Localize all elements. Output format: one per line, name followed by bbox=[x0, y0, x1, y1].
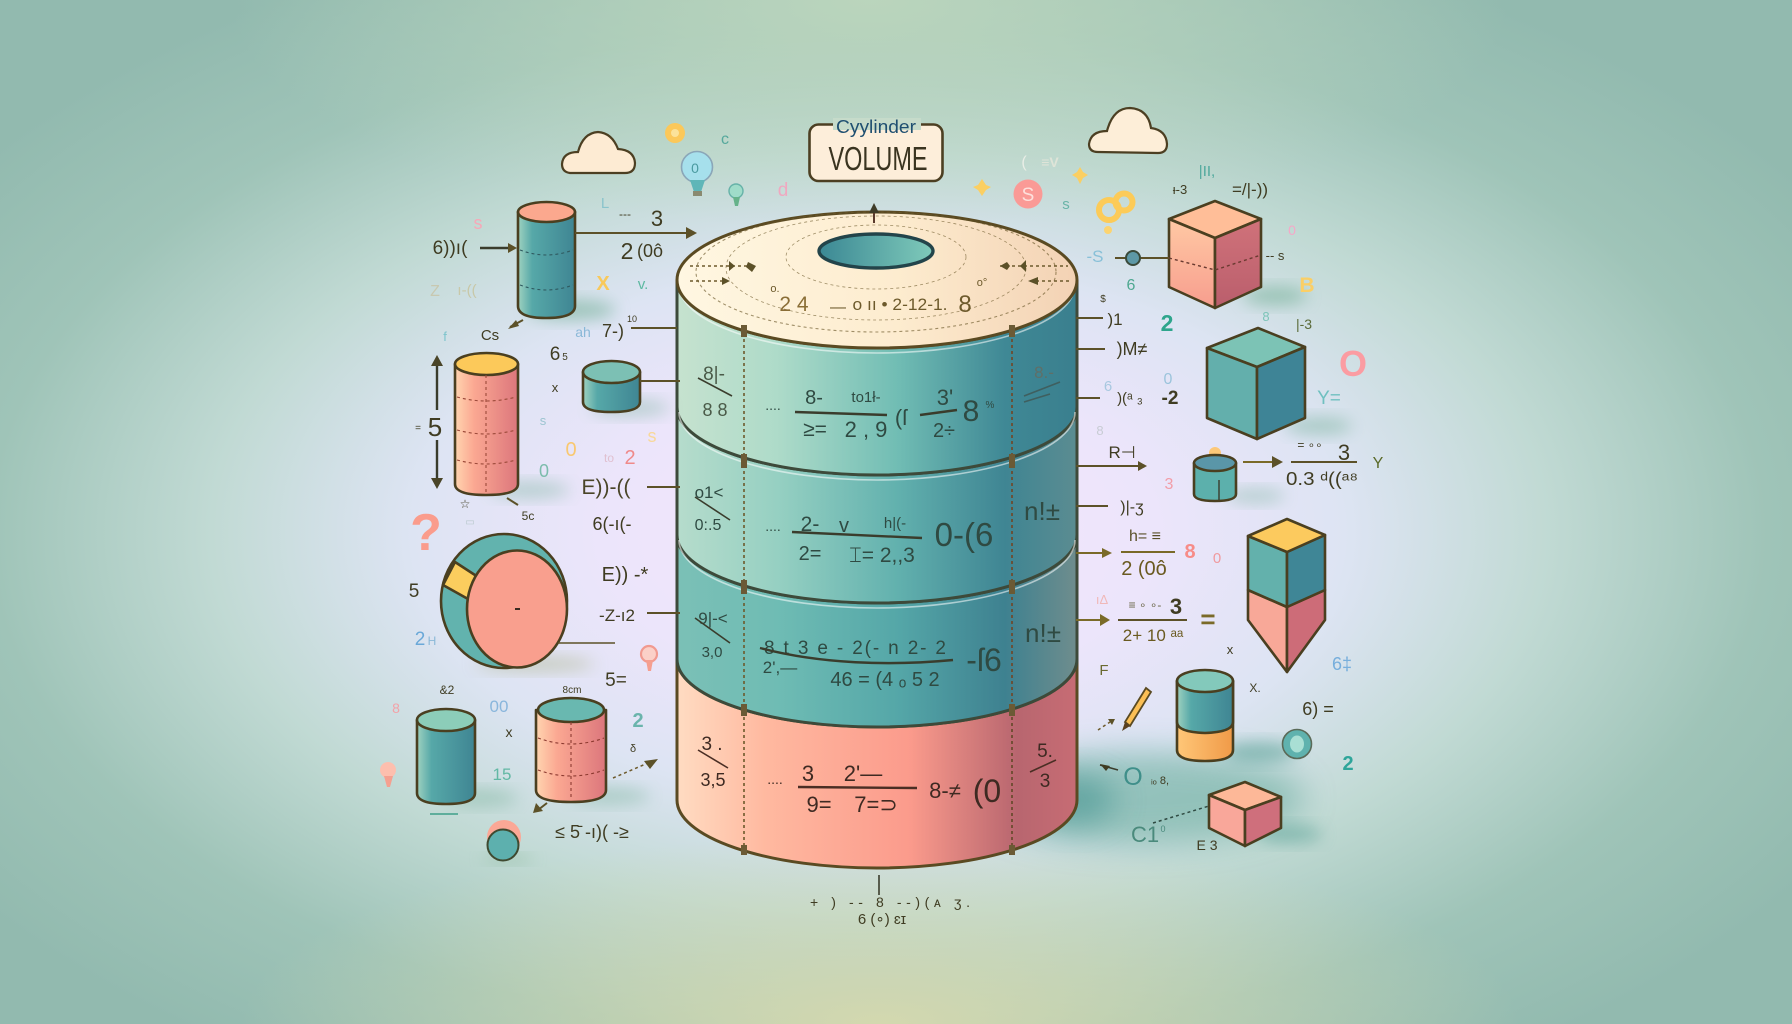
floating letters top right: ≡V bbox=[1041, 154, 1059, 170]
cube 2 teal bbox=[1207, 328, 1352, 439]
bottom dimension label: + ) -- 8 --)(ᴀ ʒ. bbox=[810, 894, 970, 910]
band 4 labels: 3 bbox=[802, 761, 814, 786]
floating letters top right: 2 bbox=[1161, 310, 1173, 336]
dashed arrow near pencil bbox=[1098, 719, 1115, 730]
band 3: teal bbox=[677, 535, 1077, 727]
arrow bbox=[533, 803, 547, 813]
cube labels top bbox=[1173, 163, 1268, 199]
band 4 labels: 9= bbox=[806, 792, 832, 817]
label over arrow: --- bbox=[619, 207, 631, 221]
floating letters top left: s bbox=[474, 213, 482, 233]
disc labels: E)) -* bbox=[602, 564, 649, 586]
top-face radius arrows left bbox=[690, 261, 756, 285]
top-face radius arrows right bbox=[1000, 260, 1070, 285]
callouts right column bbox=[1076, 294, 1216, 645]
label O near cube 3: ᵢₒ 8, bbox=[1151, 775, 1169, 787]
callout line 4 arrow bbox=[1076, 443, 1147, 471]
labels cube 3: 0 bbox=[1160, 824, 1166, 834]
band 1 labels: 8|- bbox=[703, 364, 725, 385]
label over arrow: 2 bbox=[621, 238, 633, 264]
callout band 1 left: ah bbox=[575, 324, 591, 340]
band 4 labels: 8-≠ bbox=[929, 778, 961, 803]
cube labels top: |II, bbox=[1199, 163, 1215, 180]
pink swirl ball: S bbox=[1022, 185, 1034, 206]
band 2 labels: o1< bbox=[695, 483, 723, 502]
callout band 3 left: -Z-ı2 bbox=[599, 606, 635, 625]
label 5 =: 5= bbox=[605, 670, 627, 691]
floating letters top right: 3 bbox=[1165, 476, 1174, 493]
marker ticks bbox=[741, 325, 1015, 855]
bulb salmon bbox=[380, 762, 396, 787]
band 4 labels: 7=⊃ bbox=[854, 792, 898, 817]
pink swirl ball bbox=[1014, 180, 1042, 208]
band 3 labels: 8 t 3 e - 2(- n 2- 2 bbox=[764, 638, 946, 659]
top-face formula: o ıı • 2-12-1. bbox=[852, 295, 948, 314]
top face bbox=[677, 212, 1077, 348]
top-face formula bbox=[770, 277, 987, 318]
labels near lower cylinders: 8cm bbox=[563, 685, 581, 696]
floating letters top right: s bbox=[1062, 196, 1070, 213]
labels near cylinder C: ▭ bbox=[465, 517, 475, 528]
floating letters top left: X bbox=[596, 273, 610, 295]
arrow cylinder A to main bbox=[575, 227, 697, 239]
band 1 labels: 8.- bbox=[1034, 363, 1054, 382]
callout line 4 arrow: R⊣ bbox=[1108, 443, 1136, 462]
callout band 3 left bbox=[599, 606, 680, 625]
floating letters top left: ı-(( bbox=[457, 282, 477, 299]
gold rings bbox=[1099, 194, 1132, 220]
bulb small bbox=[729, 184, 743, 206]
labels cube 3: C1 bbox=[1131, 822, 1159, 847]
floating letters top right: 8 bbox=[1096, 423, 1104, 438]
title badge bbox=[810, 117, 942, 181]
cylinder D teal bbox=[417, 709, 518, 806]
disc labels bbox=[409, 564, 649, 650]
band 3 labels: -ſ6 bbox=[966, 642, 1002, 678]
label right of ball: ≤ 5̄ -ı)( -≥ bbox=[555, 822, 629, 842]
label cylinder A left: 6))ı( bbox=[433, 238, 468, 259]
label O near cube 3 bbox=[1100, 763, 1169, 791]
band 3 labels: n!± bbox=[1025, 618, 1061, 648]
cube 1 salmon bbox=[1169, 201, 1307, 308]
band 4 labels: 3 bbox=[1040, 771, 1050, 792]
band 4 labels: 5. bbox=[1037, 741, 1053, 762]
callout fraction 6: 2 (0ô bbox=[1121, 558, 1167, 580]
concentric dashed rings on top face bbox=[696, 212, 1056, 332]
cube labels top: =/|-)) bbox=[1232, 180, 1268, 199]
band 1 labels bbox=[698, 363, 1060, 442]
band 1 labels: % bbox=[986, 400, 995, 411]
gold stars bbox=[973, 167, 1088, 196]
floating letters top left: f bbox=[443, 329, 447, 344]
connector to cube 1 bbox=[1115, 251, 1169, 265]
callout fraction 6: h= ≡ bbox=[1129, 528, 1161, 545]
floating letters top right: 0 bbox=[1213, 550, 1221, 567]
labels near cylinder C: 5c bbox=[522, 509, 534, 523]
callout band 1 left: 7-) bbox=[602, 321, 624, 341]
label O near cube 3: O bbox=[1123, 763, 1143, 791]
cloud left bbox=[562, 132, 635, 173]
floating letters top left: Z bbox=[430, 283, 440, 300]
callout line 2 bbox=[1076, 339, 1148, 359]
labels near lower cylinders: 2 bbox=[632, 710, 644, 732]
labels near lower cylinders bbox=[392, 683, 644, 784]
floating digits mid left: s bbox=[540, 413, 547, 428]
floating letters top right: X. bbox=[1249, 681, 1261, 695]
band 4 labels: 3,5 bbox=[700, 770, 726, 790]
top-face formula: 2 4 bbox=[779, 293, 809, 316]
cube 1 side labels: -- s bbox=[1266, 248, 1285, 263]
fraction right of F bbox=[1286, 438, 1384, 489]
band 3 labels bbox=[695, 609, 1061, 691]
label over arrow: (0ô bbox=[637, 241, 663, 261]
labels near lower cylinders: 8 bbox=[392, 700, 400, 716]
callout line 3: )(ᵃ ₃ bbox=[1117, 390, 1143, 407]
band 1 labels: (ſ bbox=[895, 405, 908, 430]
band 1 labels: to1ł- bbox=[851, 389, 881, 406]
floating letters top right bbox=[1021, 154, 1354, 775]
cylinder B small teal bbox=[583, 361, 680, 416]
labels near cylinder C: ☆ bbox=[460, 497, 470, 511]
bulb pink bbox=[641, 646, 657, 671]
label near small cylinder: 6 bbox=[550, 344, 560, 365]
cube 1 side labels bbox=[1262, 222, 1315, 332]
labels near lower cylinders: δ bbox=[630, 743, 636, 755]
floating digits mid left: 0 bbox=[565, 439, 577, 461]
callout band 1 left bbox=[575, 314, 677, 341]
labels near lower cylinders: 00 bbox=[490, 697, 508, 716]
up arrow above cylinder bbox=[869, 203, 879, 223]
disc labels: H bbox=[428, 634, 436, 648]
band 3 labels: 46 = (4 ₒ 5 2 bbox=[830, 669, 940, 691]
band 1 labels: 3' bbox=[937, 385, 953, 410]
floating letters top right: 6 bbox=[1127, 277, 1136, 294]
fraction right of F: = ∘∘ bbox=[1297, 438, 1323, 452]
cylinder A teal salmon top bbox=[518, 202, 616, 320]
callout line 1: )1 bbox=[1107, 310, 1123, 329]
fraction right of F: 3 bbox=[1338, 440, 1350, 465]
band 4 labels: (0 bbox=[973, 773, 1001, 809]
band 3 labels: 9|-< bbox=[698, 609, 728, 628]
band 3 labels: 2',— bbox=[763, 658, 797, 677]
band 2 labels: 2= bbox=[799, 543, 821, 565]
band 1: teal bbox=[677, 280, 1077, 475]
band 3 labels: 3,0 bbox=[702, 644, 722, 661]
top-face formula: — bbox=[830, 299, 846, 316]
top-face formula: o° bbox=[977, 277, 987, 289]
callout line 1: $ bbox=[1100, 294, 1106, 305]
band 2 labels: .... bbox=[765, 518, 781, 534]
label near small cylinder: 5 bbox=[562, 352, 568, 363]
band 1 labels: 8 8 bbox=[702, 400, 728, 420]
floating letters top left: d bbox=[778, 180, 788, 201]
callout line 3: -2 bbox=[1162, 388, 1178, 409]
prism shape yellow teal salmon bbox=[1248, 519, 1325, 672]
dashed connector cube 3 bbox=[1153, 806, 1209, 823]
main stacked cylinder bbox=[677, 212, 1077, 868]
bulb large: 0 bbox=[691, 160, 699, 176]
callout line 5: )|-ʒ bbox=[1120, 499, 1144, 516]
band 2 labels: 2- bbox=[801, 513, 819, 536]
floating letters top right: ( bbox=[1021, 154, 1027, 171]
floating digits mid left: s bbox=[648, 426, 656, 446]
band 2 labels: v bbox=[839, 515, 849, 537]
band 2 labels: 0-(6 bbox=[935, 516, 993, 553]
gold dot bbox=[1104, 226, 1112, 234]
callout fraction 7: 2+ 10 ᵃᵃ bbox=[1123, 626, 1184, 645]
height arrow of cylinder C bbox=[415, 355, 443, 489]
band 4 labels bbox=[698, 734, 1056, 817]
callout band 1 left: 10 bbox=[627, 314, 637, 324]
band 2: teal bbox=[677, 407, 1077, 603]
floating letters top left bbox=[430, 131, 788, 344]
cube 1 side labels: B bbox=[1299, 274, 1315, 297]
height marker left bbox=[743, 327, 745, 853]
bottom dimension label: 6 (∘) ɛɪ bbox=[858, 911, 906, 928]
callout band 2 left: E))-(( bbox=[582, 476, 630, 499]
floating letters top left: v. bbox=[638, 276, 648, 293]
band 1 labels: 8 bbox=[963, 395, 979, 428]
height arrow of cylinder C: = bbox=[415, 423, 421, 434]
label near small cylinder: x bbox=[552, 380, 559, 395]
ground shadow to the right of main cylinder bbox=[975, 752, 1305, 844]
cube 3 salmon bbox=[1209, 782, 1322, 846]
band 1 labels: ≥= bbox=[803, 418, 827, 441]
labels cube 3 bbox=[1131, 822, 1218, 853]
labels cube 3: E 3 bbox=[1196, 837, 1218, 853]
gold coin bbox=[665, 123, 685, 143]
callout fraction 7 bbox=[1076, 592, 1216, 645]
floating digits mid left: to bbox=[604, 451, 614, 465]
label cylinder A left bbox=[433, 238, 517, 259]
small cylinder F bbox=[1194, 447, 1285, 503]
pencil bbox=[1122, 688, 1151, 731]
top-face formula: 8 bbox=[958, 291, 972, 318]
cylinder C salmon yellow top bbox=[455, 353, 570, 498]
callout line 2: )M≠ bbox=[1117, 339, 1148, 359]
small ball bbox=[482, 820, 534, 863]
floating letters top right: 6‡ bbox=[1332, 654, 1352, 674]
disc labels: 2 bbox=[415, 629, 425, 650]
band 1 labels: .... bbox=[765, 397, 781, 413]
top-face formula: o. bbox=[770, 283, 780, 295]
band 1 labels: 2÷ bbox=[933, 420, 955, 442]
floating letters top right: 0 bbox=[1164, 371, 1173, 388]
callout line 1 bbox=[1076, 294, 1123, 329]
labels near lower cylinders: 15 bbox=[493, 765, 511, 784]
floating letters top left: c bbox=[721, 131, 729, 148]
callout fraction 7: ıΔ bbox=[1096, 592, 1108, 607]
floating letters top right: 2 bbox=[1342, 753, 1354, 775]
floating letters top left: L bbox=[601, 195, 609, 212]
floating digits mid left bbox=[539, 413, 656, 481]
floating letters top right: F bbox=[1099, 662, 1109, 679]
label below: 6(-ı(- bbox=[592, 514, 632, 534]
band 4 labels: 2'— bbox=[844, 761, 882, 786]
callout fraction 7: ≡ ∘ ∘- bbox=[1129, 598, 1161, 612]
teal ring bbox=[1282, 730, 1312, 758]
disc labels: 5 bbox=[409, 581, 419, 602]
band 1 labels: 2 , 9 bbox=[845, 417, 887, 442]
band 2 labels: 0:.5 bbox=[695, 517, 721, 534]
cube 1 side labels: 0 bbox=[1288, 222, 1296, 238]
callout fraction 7: 3 bbox=[1170, 594, 1182, 619]
fraction right of F: 0.3 ᵈ((ᵃ⁸ bbox=[1286, 469, 1358, 489]
callout line 3 bbox=[1076, 388, 1178, 409]
height marker right bbox=[1011, 327, 1013, 853]
hole in the top face bbox=[819, 234, 933, 268]
floating letters top right: 8 bbox=[1184, 541, 1196, 563]
callout line 5 bbox=[1076, 499, 1144, 516]
bulb large bbox=[682, 152, 712, 196]
bottom dimension label bbox=[810, 875, 970, 928]
band 4 labels: .... bbox=[767, 771, 783, 787]
band 4 labels: 3 . bbox=[701, 734, 723, 755]
callout fraction 6 bbox=[1076, 528, 1175, 580]
band 4: salmon bbox=[677, 659, 1077, 868]
height arrow of cylinder C: 5 bbox=[428, 412, 442, 442]
cylinder G teal and orange bbox=[1177, 670, 1296, 762]
labels near lower cylinders: x bbox=[506, 724, 512, 740]
large pink O: O bbox=[1339, 343, 1367, 384]
band 1 labels: 8- bbox=[805, 387, 823, 409]
label over arrow bbox=[619, 206, 663, 264]
callout band 2 left bbox=[582, 476, 680, 499]
question mark: ? bbox=[410, 504, 442, 562]
label Y=: Y= bbox=[1317, 388, 1341, 409]
label near small cylinder bbox=[550, 344, 568, 395]
arrow and label below cylinder A bbox=[481, 320, 523, 344]
cube 1 side labels: |-3 bbox=[1296, 316, 1312, 332]
band highlights bbox=[679, 285, 1075, 608]
floating letters top right: 6) = bbox=[1302, 699, 1334, 719]
callout fraction 7: = bbox=[1200, 604, 1216, 634]
arrow from cylinder F bbox=[1243, 456, 1283, 468]
underline bbox=[430, 813, 458, 815]
floating letters top right: -S bbox=[1086, 247, 1104, 266]
title top line: Cyylinder bbox=[836, 117, 916, 137]
floating letters top right: 6 bbox=[1104, 378, 1112, 395]
band 2 labels bbox=[695, 483, 1060, 567]
fraction right of F: Y bbox=[1373, 455, 1384, 472]
label over arrow: 3 bbox=[651, 206, 663, 231]
arrow and label below cylinder A: Cs bbox=[481, 327, 499, 344]
band 2 labels: h|(- bbox=[884, 515, 906, 532]
title main word: VOLUME bbox=[828, 140, 928, 177]
cylinder E salmon teal top bbox=[536, 698, 650, 804]
dashed arrow bbox=[613, 759, 658, 778]
floating digits mid left: 2 bbox=[624, 447, 636, 469]
floating letters top right: x bbox=[1227, 642, 1234, 657]
band 2 labels: ⌶= 2,,3 bbox=[849, 544, 915, 567]
cube labels top: ᵻ-3 bbox=[1173, 182, 1187, 197]
labels near lower cylinders: &2 bbox=[440, 683, 455, 697]
cube 1 side labels: 8 bbox=[1262, 309, 1270, 324]
cloud right bbox=[1089, 108, 1167, 153]
labels near cylinder C bbox=[460, 497, 534, 528]
floating digits mid left: 0 bbox=[539, 461, 549, 481]
band 2 labels: n!± bbox=[1024, 496, 1060, 526]
disc shape bbox=[441, 534, 615, 671]
